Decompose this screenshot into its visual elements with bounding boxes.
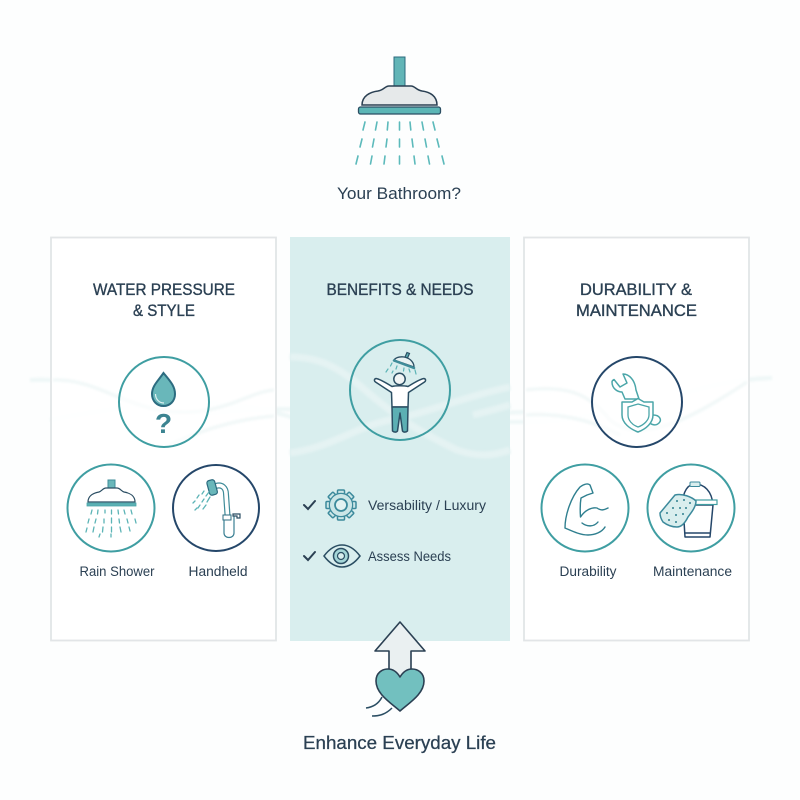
arrow: up arrow with heart (366, 622, 425, 716)
label: handheld: Handheld (188, 564, 248, 579)
icon: rain shower (68, 464, 154, 552)
panel: water pressure and style (51, 238, 276, 640)
icon: flexed arm (542, 464, 628, 552)
icon: main shower head (356, 57, 444, 164)
title: enhance everyday life: Enhance Everyday Life (303, 733, 496, 753)
icon: handheld shower (173, 465, 259, 551)
heading: water pressure and style (93, 281, 235, 320)
icon: gear (326, 490, 356, 520)
background waves (30, 378, 772, 430)
heading: water pressure and style: & STYLE (133, 302, 195, 320)
title: your bathroom: Your Bathroom? (337, 185, 461, 203)
label: rain shower: Rain Shower (80, 564, 155, 579)
label: assess needs: Assess Needs (368, 549, 451, 564)
heading: durability and maintenance: DURABILITY & (580, 281, 692, 299)
panel: durability and maintenance (524, 238, 749, 640)
label: durability: Durability (560, 564, 617, 579)
heading: durability and maintenance: MAINTENANCE (576, 302, 697, 320)
icon: wrench and shield (592, 357, 682, 447)
icon: water drop and question mark (119, 357, 209, 447)
icon: bucket and sponge (648, 464, 734, 552)
panel: benefits and needs (290, 237, 510, 641)
icon: eye (324, 545, 360, 567)
check: assess needs (304, 552, 315, 560)
label: maintenance: Maintenance (653, 564, 732, 579)
check: versability (304, 501, 315, 509)
heading: durability and maintenance (576, 281, 697, 320)
heading: benefits and needs: BENEFITS & NEEDS (326, 281, 474, 299)
label: versability luxury: Versability / Luxury (368, 498, 486, 513)
heading: water pressure and style: WATER PRESSURE (93, 281, 235, 299)
icon: water drop and question mark: ? (155, 408, 172, 439)
icon: person under shower (350, 340, 450, 440)
